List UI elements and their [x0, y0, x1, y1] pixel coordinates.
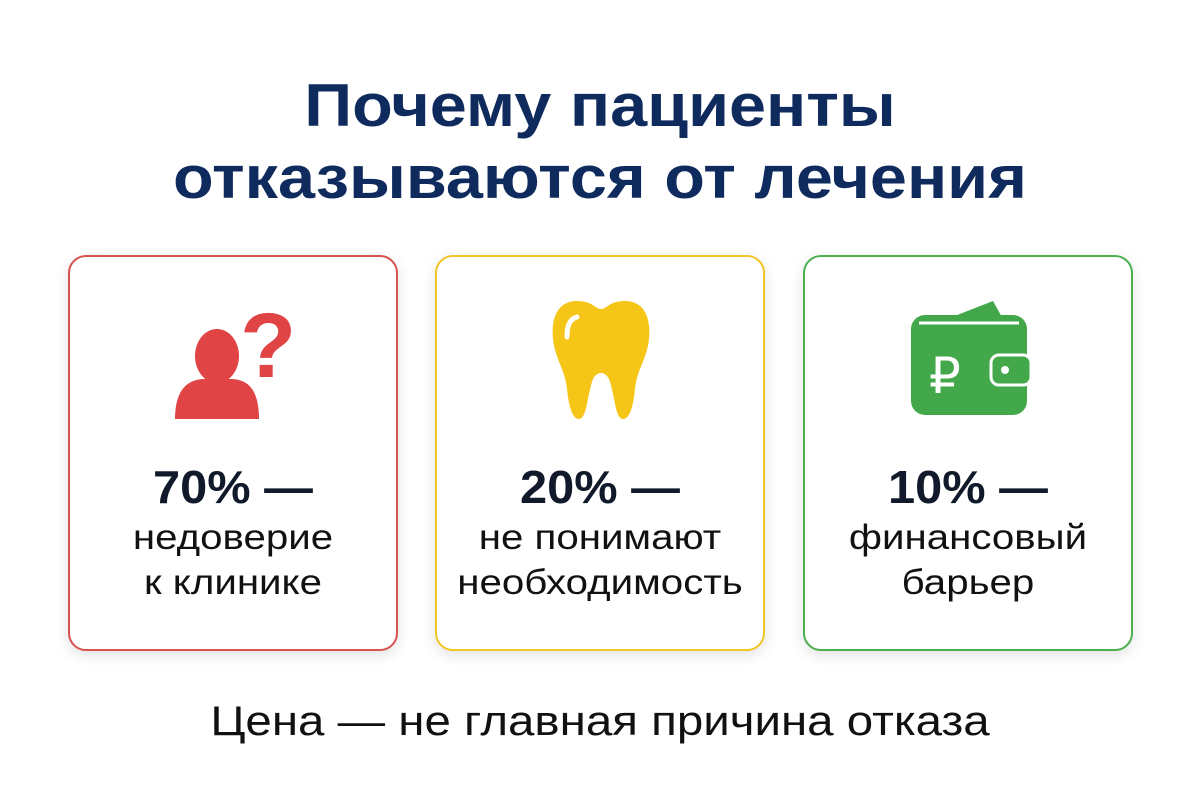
panel: distrust — [68, 255, 398, 651]
icon: tooth — [552, 301, 650, 419]
icon: wallet with ruble: ₽ — [929, 347, 961, 405]
title — [173, 72, 1027, 211]
icon: person with question — [175, 295, 296, 419]
icon: wallet with ruble — [911, 301, 1030, 415]
description: финансовый — [849, 518, 1087, 557]
title: отказываются от лечения — [173, 144, 1027, 211]
panel: understanding — [435, 255, 765, 651]
description: не понимают — [479, 518, 721, 557]
stat text: 20% — — [520, 461, 680, 513]
description — [133, 518, 333, 602]
description — [457, 518, 743, 602]
description: барьер — [902, 563, 1034, 602]
description: к клинике — [144, 563, 322, 602]
panel: finance — [803, 255, 1133, 651]
title: Почему пациенты — [304, 72, 896, 139]
description — [849, 518, 1087, 602]
footer caption: Цена — не главная причина отказа — [210, 697, 990, 744]
description: необходимость — [457, 563, 743, 602]
stat text: 70% — — [153, 461, 313, 513]
stat text: 10% — — [888, 461, 1048, 513]
description: недоверие — [133, 518, 333, 557]
icon: person with question: ? — [240, 295, 296, 397]
